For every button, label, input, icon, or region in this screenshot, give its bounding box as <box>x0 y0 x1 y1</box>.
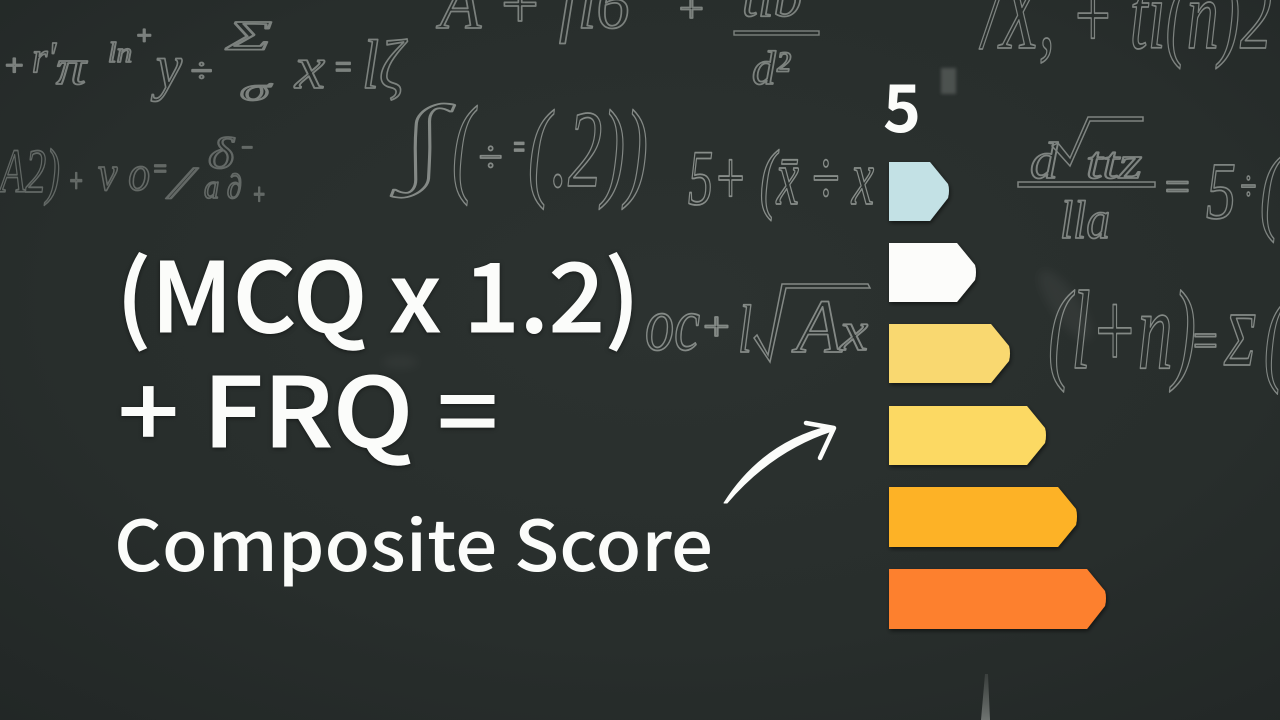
chalk equations: top left row: = <box>333 49 353 86</box>
chalk equations: integral: ÷ <box>478 131 502 182</box>
chalk equations: root expression: l <box>738 291 752 367</box>
chalk equations: five plus x: 5+ (x̄ ÷ x <box>688 134 874 221</box>
chalk equations: second left row: / <box>165 157 199 208</box>
chalk equations: second left row: + <box>68 163 84 200</box>
chalk equations: root fraction: = <box>1162 164 1192 209</box>
chalk equations: root expression: x <box>839 301 868 363</box>
chalk equations: root fraction: ÷ <box>1240 164 1256 210</box>
chalk equations: top left row: σ <box>240 71 272 107</box>
bar: pale blue <box>889 162 949 221</box>
chalk equations: root fraction: ttz <box>1086 137 1142 188</box>
title: formula: + FRQ = <box>118 336 498 475</box>
chalk equations: top left row: x <box>294 35 325 101</box>
chalk equations: second left row: = <box>152 154 168 185</box>
chalk equations: second left row: a ∂ <box>204 169 242 206</box>
chalk equations: integral: ∫ <box>390 86 456 198</box>
chalk equations: second left row: v o <box>98 145 150 201</box>
chalk equations: root fraction: lla <box>1060 190 1110 250</box>
chalk equations: second left row: δ <box>208 129 236 178</box>
chalk equations: top left row: y <box>151 31 183 102</box>
bar: light yellow <box>889 324 1010 383</box>
chalk equations: top left row <box>3 14 408 107</box>
chalk equations: root expression <box>645 283 870 369</box>
chalk equations: top centre <box>436 0 819 95</box>
bar: orange <box>889 569 1106 629</box>
chalk equations: second left row: + <box>252 178 266 211</box>
chalk equations: integral: (.2)) <box>528 88 648 210</box>
chalk equations: second left row: − <box>240 133 254 162</box>
chalk equations: top left row: ln <box>108 38 132 69</box>
chalk equations: top left row: lζ <box>362 27 408 104</box>
title: formula <box>116 221 640 475</box>
title: formula: (MCQ x 1.2) <box>116 221 640 360</box>
chalk equations: sum: (l+n) <box>1048 269 1196 393</box>
chalk equations: root expression: A <box>791 285 843 369</box>
arrow <box>724 423 834 503</box>
chalk equations: integral: = <box>512 129 526 166</box>
chalk equations: root fraction <box>1018 117 1280 250</box>
chalk equations: root fraction: 5 <box>1206 145 1236 236</box>
chalk equations: root expression: + <box>700 304 732 349</box>
bar: yellow <box>889 406 1046 465</box>
chalk equations: second left row <box>0 129 266 211</box>
subtitle: composite score: Composite Score <box>114 491 713 592</box>
chalk equations: top left row: Σ <box>224 14 272 60</box>
score scale <box>883 56 1106 629</box>
chalk equations: top left row: ÷ <box>190 53 212 90</box>
chalk equations: integral <box>390 84 648 210</box>
chalk equations: second left row: A2) <box>0 138 60 206</box>
bar: white <box>889 243 976 302</box>
bar: amber <box>889 487 1077 547</box>
chalk equations: root expression: oc <box>645 283 700 367</box>
chalk equations: top left row: r' <box>32 33 57 82</box>
chalk equations: top left row: + <box>135 21 153 50</box>
chalk equations: root fraction: d <box>1030 133 1059 190</box>
chalk equations: top centre: d² <box>752 42 792 95</box>
chalk equations: top left row: + <box>3 49 25 82</box>
score label: 5: 5 <box>883 56 921 152</box>
chalk equations: integral: ( <box>452 84 478 206</box>
chalk equations: sum: = <box>1190 313 1220 370</box>
chalk equations: top left row: π <box>56 39 88 95</box>
chalk smudges <box>382 68 1101 720</box>
chalk equations: sum: Σ <box>1223 298 1256 382</box>
